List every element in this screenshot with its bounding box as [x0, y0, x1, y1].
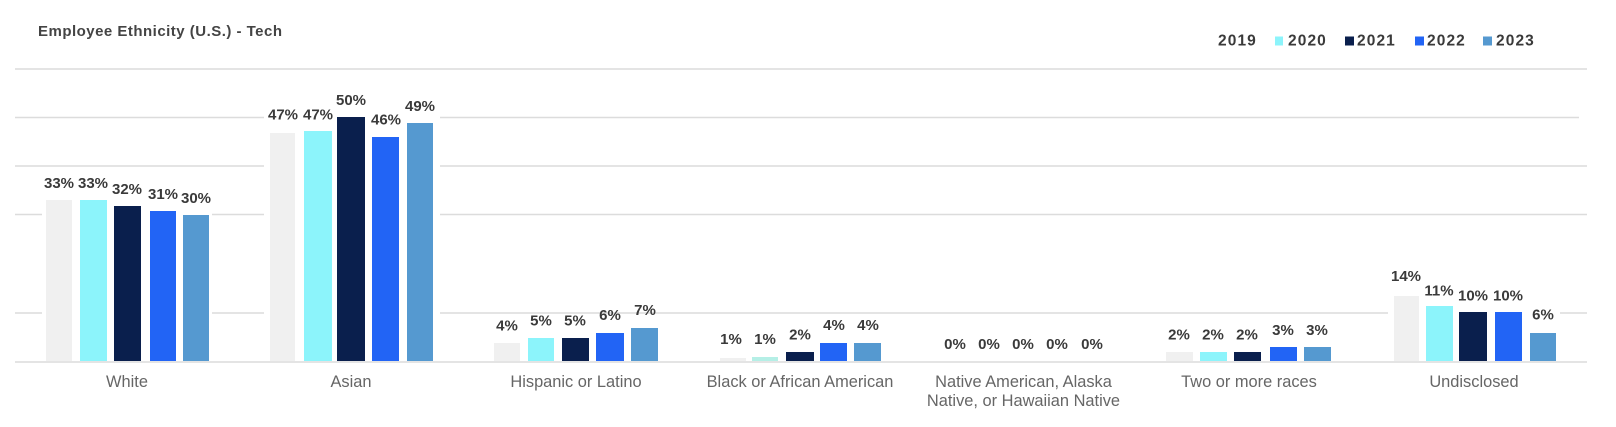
group: Native American, Alaska Native, or Hawaiian Native: 0%	[978, 336, 1000, 353]
group: White: 33%	[78, 175, 108, 192]
legend: 2020	[1288, 32, 1327, 50]
group: Black or African American	[707, 317, 893, 391]
title: Employee Ethnicity (U.S.) - Tech	[38, 23, 282, 40]
legend: 2021	[1357, 32, 1396, 50]
group: Black or African American: Black or African American	[707, 373, 893, 391]
group: Two or more races: Two or more races	[1181, 373, 1317, 391]
group: Hispanic or Latino: 4%	[496, 318, 518, 334]
group: White: 33%	[44, 175, 74, 192]
group: White: White	[106, 373, 148, 391]
legend: 2023	[1496, 32, 1535, 50]
group: Asian: 50%	[336, 92, 366, 109]
group: Native American, Alaska Native, or Hawaiian Native	[927, 336, 1120, 410]
group: Undisclosed: Undisclosed	[1429, 373, 1519, 391]
group: Undisclosed: 11%	[1424, 282, 1454, 300]
group: Asian: 46%	[371, 112, 401, 128]
group: White: 30%	[181, 190, 211, 207]
group: Hispanic or Latino: 5%	[530, 312, 552, 330]
group: Two or more races: 2%	[1236, 326, 1258, 344]
group: Black or African American: 1%	[754, 331, 776, 348]
legend: 2019	[1218, 32, 1257, 50]
group: Two or more races: 2%	[1168, 326, 1190, 344]
group: Black or African American: 4%	[857, 317, 879, 334]
group: Black or African American: 2%	[789, 326, 811, 344]
group: Asian: 47%	[303, 106, 333, 124]
group: Asian: Asian	[330, 373, 372, 391]
group: Hispanic or Latino: 7%	[634, 302, 656, 319]
group: Native American, Alaska Native, or Hawaiian Native: Native, or Hawaiian Native	[927, 392, 1120, 410]
group: Asian	[264, 92, 440, 391]
group: Black or African American: 1%	[720, 331, 742, 348]
group: Hispanic or Latino: 6%	[599, 307, 621, 324]
group: Asian: 49%	[405, 98, 435, 115]
group: Undisclosed: 10%	[1493, 288, 1523, 304]
group: Two or more races: 3%	[1306, 322, 1328, 339]
group: Black or African American: 4%	[823, 317, 845, 334]
legend	[1218, 32, 1535, 50]
group: White: 32%	[112, 181, 142, 198]
group: Two or more races	[1166, 322, 1331, 391]
group: White: 31%	[148, 186, 178, 203]
group: Undisclosed: 14%	[1391, 268, 1421, 285]
group: Native American, Alaska Native, or Hawaiian Native: 0%	[1081, 336, 1103, 353]
group: Asian: 47%	[268, 106, 298, 124]
group: Undisclosed	[1388, 268, 1560, 391]
group: Hispanic or Latino	[494, 302, 658, 391]
group: Native American, Alaska Native, or Hawaiian Native: 0%	[1046, 336, 1068, 353]
group: Hispanic or Latino: Hispanic or Latino	[510, 373, 642, 391]
group: Undisclosed: 10%	[1458, 288, 1488, 304]
legend: 2022	[1427, 32, 1466, 50]
group: White	[42, 175, 212, 391]
group: Native American, Alaska Native, or Hawaiian Native: 0%	[1012, 336, 1034, 353]
group: Native American, Alaska Native, or Hawaiian Native: 0%	[944, 336, 966, 353]
grid lines	[15, 69, 1587, 362]
group: Hispanic or Latino: 5%	[564, 312, 586, 330]
group: Two or more races: 3%	[1272, 322, 1294, 339]
group: Undisclosed: 6%	[1532, 306, 1554, 324]
group: Two or more races: 2%	[1202, 326, 1224, 344]
group: Native American, Alaska Native, or Hawaiian Native: Native American, Alaska	[935, 373, 1113, 391]
